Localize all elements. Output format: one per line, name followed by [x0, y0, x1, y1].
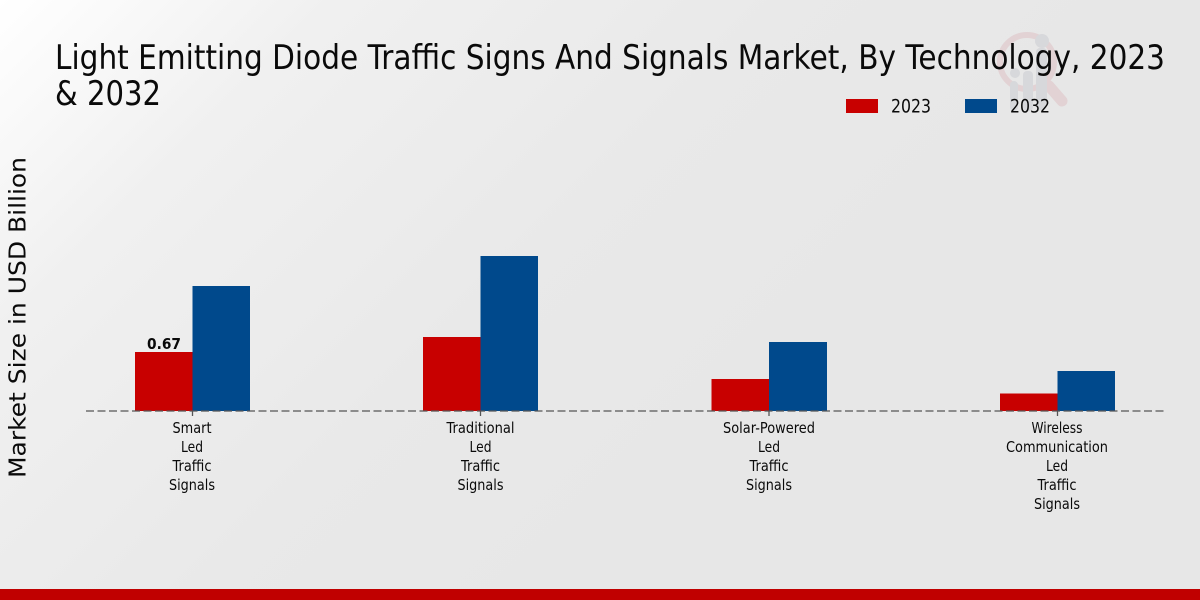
category label: Wireless Communication Led Traffic Signals: Communication	[1006, 438, 1108, 456]
category label: Traditional Led Traffic Signals: Traditional	[446, 419, 514, 437]
category label: Wireless Communication Led Traffic Signals: Signals	[1034, 495, 1080, 513]
category label: Solar-Powered Led Traffic Signals: Signals	[746, 476, 792, 494]
legend item: 2023: 2023	[891, 96, 931, 118]
legend item: 2032: 2032	[1010, 96, 1050, 118]
category label: Wireless Communication Led Traffic Signals: Led	[1046, 457, 1068, 475]
category label: Traditional Led Traffic Signals	[446, 419, 514, 494]
group: Traditional Led Traffic Signals	[423, 256, 538, 411]
legend	[846, 96, 1050, 118]
group: Wireless Communication Led Traffic Signals	[1000, 371, 1115, 411]
category label: Wireless Communication Led Traffic Signals: Wireless	[1032, 419, 1082, 437]
group: Smart Led Traffic Signals	[135, 286, 250, 411]
category label: Solar-Powered Led Traffic Signals: Solar-Powered	[723, 419, 815, 437]
category label: Solar-Powered Led Traffic Signals	[723, 419, 815, 494]
group: Solar-Powered Led Traffic Signals	[712, 342, 827, 411]
x axis baseline	[86, 411, 1164, 416]
category label: Smart Led Traffic Signals: Led	[181, 438, 203, 456]
category label: Smart Led Traffic Signals	[169, 419, 215, 494]
footer bar	[0, 589, 1200, 600]
category label: Smart Led Traffic Signals: Smart	[172, 419, 212, 437]
category label: Wireless Communication Led Traffic Signals: Traffic	[1037, 476, 1076, 494]
category label: Smart Led Traffic Signals: Signals	[169, 476, 215, 494]
category label: Solar-Powered Led Traffic Signals: Led	[758, 438, 780, 456]
value label: 0.67	[147, 335, 181, 353]
title	[55, 38, 1165, 114]
bar chart	[135, 256, 1115, 411]
y axis label: Market Size in USD Billion	[6, 157, 32, 478]
legend item: 2032	[965, 96, 1050, 118]
legend item: 2023	[846, 96, 931, 118]
category label: Traditional Led Traffic Signals: Traffic	[460, 457, 500, 475]
category label: Wireless Communication Led Traffic Signals	[1006, 419, 1108, 513]
category label: Traditional Led Traffic Signals: Signals	[458, 476, 504, 494]
category label: Solar-Powered Led Traffic Signals: Traffic	[749, 457, 788, 475]
category label: Smart Led Traffic Signals: Traffic	[172, 457, 212, 475]
category label: Traditional Led Traffic Signals: Led	[470, 438, 492, 456]
watermark logo	[1000, 34, 1062, 111]
title: & 2032	[55, 74, 161, 114]
